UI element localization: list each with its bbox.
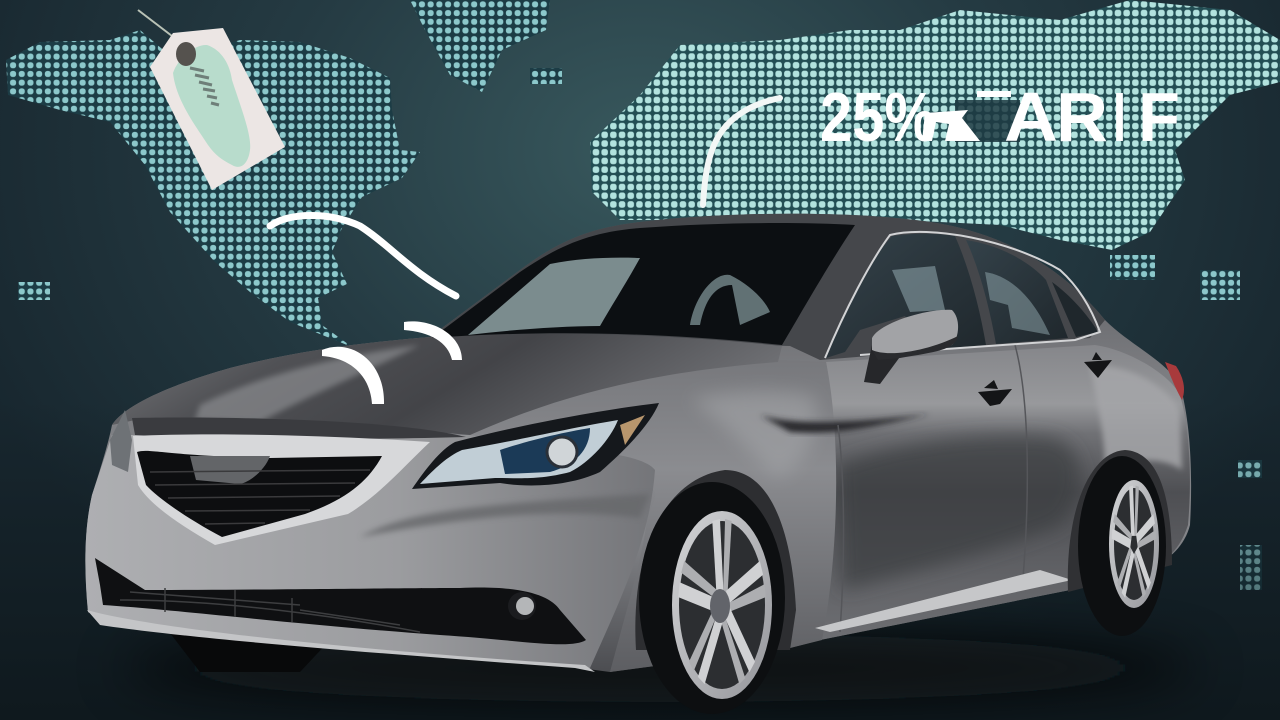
rear arch	[1068, 450, 1172, 592]
grille slats	[150, 470, 370, 524]
price tag	[138, 10, 285, 190]
tag card	[150, 28, 285, 190]
rear window reflection	[985, 272, 1050, 335]
fender highlight	[690, 391, 816, 478]
door seams	[838, 345, 1027, 632]
map: Eurasia	[590, 0, 1280, 250]
front rim	[672, 511, 772, 699]
front side window	[826, 234, 986, 358]
rear tyre	[1078, 456, 1166, 636]
side mirror	[864, 310, 958, 384]
windshield reflection	[468, 258, 640, 335]
chrome window trim	[825, 232, 1100, 358]
bumper	[85, 435, 655, 668]
tag hole	[176, 42, 196, 66]
arrow: Europe to roof	[703, 98, 780, 205]
title: 25% tariff: F	[1138, 78, 1180, 156]
fog lamp	[508, 592, 536, 620]
door handles	[978, 352, 1112, 406]
front tyre	[639, 482, 785, 714]
map: North America	[6, 30, 420, 347]
quarter window	[1052, 282, 1098, 337]
lower intake	[95, 558, 586, 644]
title number: 25%	[820, 78, 936, 156]
bumper crease shadow	[360, 494, 650, 537]
title: 25% tariff	[820, 78, 1180, 156]
tag green label	[173, 45, 250, 167]
headlight amber	[620, 415, 645, 445]
title glitched letter	[922, 110, 980, 141]
mirror shell	[872, 310, 958, 355]
arrow: hood front	[322, 347, 384, 404]
tag string	[138, 10, 172, 36]
rear quarter highlight	[1090, 365, 1182, 470]
map: Greenland	[410, 0, 550, 92]
front window reflection	[892, 266, 945, 312]
left headlight cluster	[110, 410, 132, 472]
windshield	[432, 223, 855, 345]
front hub	[710, 589, 730, 623]
grille	[133, 434, 430, 545]
grille opening	[137, 451, 382, 537]
tail light	[1165, 362, 1184, 400]
rear door window	[966, 240, 1068, 344]
mirror arm	[864, 345, 905, 384]
headlight lens	[420, 420, 618, 484]
tag barcode marks	[190, 68, 219, 105]
rear rim	[1109, 480, 1159, 608]
title patch	[955, 100, 1020, 142]
hood	[112, 334, 782, 435]
sill highlight	[815, 570, 1072, 632]
headlight housing	[412, 403, 659, 489]
grille badge shade	[190, 456, 270, 484]
door dark band	[838, 435, 1080, 590]
front lip	[87, 610, 595, 672]
rear wheel	[1068, 450, 1172, 636]
front spokes	[677, 519, 767, 686]
arrow: hood middle	[404, 321, 462, 360]
front underbody	[160, 620, 330, 672]
door panels	[820, 345, 1190, 640]
title T bar	[977, 91, 1011, 97]
floor gradient	[0, 400, 1280, 720]
headlight	[412, 403, 659, 489]
map: scattered islands	[18, 68, 1262, 590]
car	[85, 214, 1200, 714]
intake mesh	[120, 588, 420, 632]
title letters: A	[1004, 78, 1058, 156]
rear spokes	[1111, 486, 1157, 599]
headlight blue	[500, 428, 590, 474]
intake body	[95, 558, 586, 644]
grille chrome	[133, 434, 430, 545]
car ground shadow	[120, 634, 1200, 702]
headlight bulb	[547, 437, 577, 467]
fender	[470, 360, 836, 672]
body silhouette	[85, 214, 1191, 672]
roof	[430, 214, 1105, 360]
hood highlight	[195, 345, 420, 422]
title: 25% tariff: R	[1056, 78, 1108, 156]
front wheel arch	[635, 470, 796, 650]
arrow: North America to hood	[270, 216, 456, 296]
hood lip	[132, 418, 466, 439]
seat reflection	[690, 275, 770, 325]
shoulder crease	[760, 414, 930, 433]
front wheel	[639, 482, 785, 714]
title: 25% tariff: I	[1113, 78, 1126, 156]
